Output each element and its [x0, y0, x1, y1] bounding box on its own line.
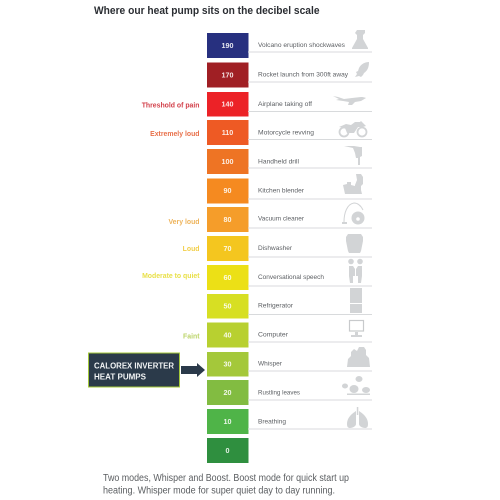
sound descriptions: Whisper [258, 360, 283, 368]
arrow to 30 dB [181, 363, 205, 377]
sound descriptions: Airplane taking off [258, 101, 312, 108]
icon: volcano [352, 30, 368, 49]
callout: Calorex inverter heat pumps [88, 353, 180, 387]
decibel scale bars: 20 [224, 388, 232, 397]
decibel scale bars: 140 [222, 100, 234, 108]
decibel scale bars: 0 [226, 446, 230, 455]
footer text [103, 473, 349, 496]
icon: people talking [348, 259, 363, 283]
decibel scale bars: 80 [224, 215, 232, 224]
sound descriptions: Motorcycle revving [258, 130, 314, 136]
decibel scale bars: 190 [222, 41, 234, 50]
icon: refrigerator [350, 288, 362, 313]
decibel scale bars [207, 33, 248, 463]
footer text: Two modes, Whisper and Boost. Boost mode for quick start up [103, 473, 349, 484]
icon: computer monitor [350, 320, 364, 337]
decibel scale bars: 90 [224, 186, 232, 195]
sound descriptions: Rustling leaves [258, 390, 301, 396]
decibel scale bars: 10 [224, 417, 232, 426]
sound descriptions: Computer [258, 332, 289, 338]
icon: motorcycle [339, 121, 366, 136]
icon: dishwasher [346, 234, 363, 253]
title: Where our heat pump sits on the decibel scale [94, 5, 320, 17]
sound descriptions: Refrigerator [258, 302, 294, 310]
sound descriptions: Dishwasher [258, 245, 293, 252]
decibel scale bars: 60 [224, 273, 232, 282]
loudness labels: Very loud [168, 219, 200, 226]
sound descriptions: Breathing [258, 418, 286, 426]
decibel scale bars: 170 [222, 70, 234, 80]
loudness labels: Moderate to quiet [142, 273, 200, 280]
sound descriptions [258, 42, 349, 426]
sound descriptions: Conversational speech [258, 274, 324, 281]
sound descriptions: Handheld drill [258, 158, 299, 166]
icon: lungs [347, 407, 368, 428]
icon: kitchen blender [343, 174, 363, 194]
icon: rustling leaves [342, 376, 370, 395]
sound descriptions: Rocket launch from 300ft away [258, 72, 349, 78]
decibel scale bars: 30 [224, 360, 232, 368]
icon: vacuum cleaner [342, 203, 364, 224]
callout: Calorex inverter heat pumps: HEAT PUMPS [94, 372, 147, 382]
loudness labels: Loud [183, 246, 200, 253]
icon: airplane [333, 96, 366, 105]
sound descriptions: Vacuum cleaner [258, 216, 305, 222]
loudness labels: Faint [183, 334, 200, 340]
loudness labels: Threshold of pain [142, 102, 200, 110]
decibel scale bars: 100 [222, 157, 234, 166]
decibel scale bars: 110 [222, 128, 233, 137]
icon: handheld drill [344, 146, 362, 165]
sound descriptions: Volcano eruption shockwaves [258, 42, 346, 49]
icon: whisper people [347, 347, 370, 367]
decibel scale bars: 40 [224, 330, 232, 340]
icon: rocket [355, 62, 369, 77]
loudness labels [142, 102, 200, 340]
sound descriptions: Kitchen blender [258, 188, 305, 194]
decibel scale bars: 70 [224, 244, 232, 253]
loudness labels: Extremely loud [150, 131, 200, 138]
footer text: heating. Whisper mode for super quiet day to day running. [103, 486, 335, 496]
decibel scale bars: 50 [224, 302, 232, 310]
callout: Calorex inverter heat pumps: CALOREX INVERTER [94, 362, 174, 370]
